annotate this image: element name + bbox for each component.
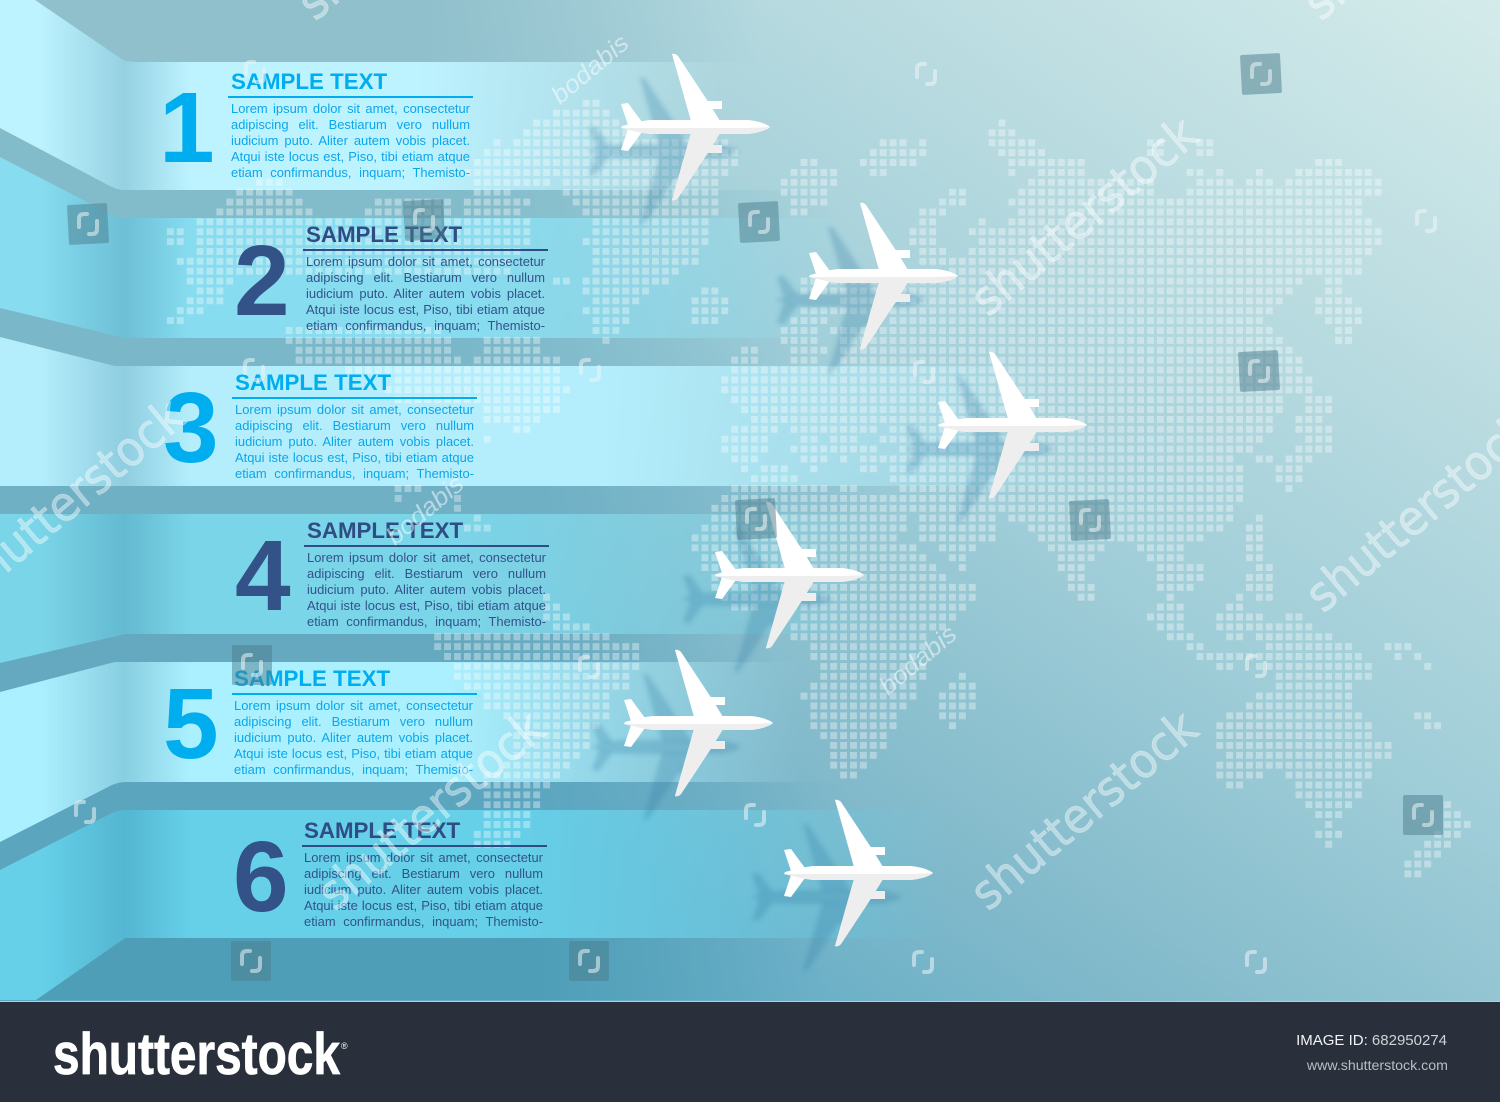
watermark: contributor name: bodabis (546, 29, 634, 110)
body text 3: iudicium puto. Aliter autem vobis placet. (235, 434, 474, 449)
watermark: contributor name: bodabis (381, 470, 469, 551)
body text 4: Atqui iste locus est, Piso, tibi etiam atque (307, 598, 546, 613)
section 5: number, heading and text (163, 666, 477, 780)
body text 5 (234, 698, 473, 777)
footer bar (0, 1001, 1500, 1102)
ribbon 4 (0, 514, 900, 663)
plane shadows (589, 78, 1055, 970)
heading 3: SAMPLE TEXT (235, 370, 391, 394)
body text 2: etiam confirmandus, inquam; Themisto- (306, 318, 545, 333)
heading 1: SAMPLE TEXT (231, 68, 387, 94)
ribbon 1 (0, 0, 760, 190)
dotted world map (167, 103, 1474, 874)
ribbon 5 (0, 662, 800, 842)
ribbon 6 (0, 810, 950, 1000)
body text 3: etiam confirmandus, inquam; Themisto- (235, 466, 474, 481)
body text 5: Lorem ipsum dolor sit amet, consectetur (234, 698, 473, 713)
number 4: 4 (235, 520, 291, 632)
watermark: shutterstock text: shutterstock (960, 105, 1209, 327)
body text 1: iudicium puto. Aliter autem vobis placet. (231, 133, 470, 148)
section 2: number, heading and text (234, 222, 548, 337)
heading 6: SAMPLE TEXT (304, 818, 460, 842)
number 5: 5 (163, 668, 219, 780)
body text 6: iudicium puto. Aliter autem vobis placet. (304, 882, 543, 897)
plane 4 (715, 502, 864, 648)
body text 2: adipiscing elit. Bestiarum vero nullum (306, 270, 545, 285)
watermark: shutterstock text: shutterstock (307, 699, 556, 921)
body text 4: adipiscing elit. Bestiarum vero nullum (307, 566, 546, 581)
body text 6: Lorem ipsum dolor sit amet, consectetur (304, 850, 543, 865)
section 1: number, heading and text (159, 68, 473, 184)
section 4: number, heading and text (235, 518, 549, 632)
body text 1: Atqui iste locus est, Piso, tibi etiam atque (231, 149, 470, 164)
body text 1: Lorem ipsum dolor sit amet, consectetur (231, 101, 470, 116)
body text 2: iudicium puto. Aliter autem vobis placet. (306, 286, 545, 301)
body text 4: etiam confirmandus, inquam; Themisto- (307, 614, 546, 629)
number 2: 2 (234, 225, 290, 337)
ribbon 2 (0, 157, 850, 338)
body text 5: etiam confirmandus, inquam; Themisto- (234, 762, 473, 777)
body text 6: Atqui iste locus est, Piso, tibi etiam atque (304, 898, 543, 913)
shadow bands between ribbons (0, 0, 890, 1000)
number 6: 6 (233, 821, 289, 933)
section 6: number, heading and text (233, 818, 547, 933)
body text 5: Atqui iste locus est, Piso, tibi etiam atque (234, 746, 473, 761)
logo: shutterstock (53, 1022, 341, 1087)
number 1: 1 (159, 72, 215, 184)
watermark: square icons (67, 53, 1443, 981)
logo: ® (341, 1041, 348, 1051)
body text 6 (304, 850, 543, 929)
watermark: corner glyphs (76, 62, 1435, 972)
body text 1: adipiscing elit. Bestiarum vero nullum (231, 117, 470, 132)
number 3: 3 (163, 372, 219, 484)
plane 1 (621, 54, 770, 200)
ribbon 3 (0, 337, 1090, 486)
plane 6 (784, 800, 933, 946)
body text 3: adipiscing elit. Bestiarum vero nullum (235, 418, 474, 433)
plane 5 (624, 650, 773, 796)
plane 2 (809, 203, 958, 349)
plane 3 (938, 352, 1087, 498)
watermark: contributor name (381, 29, 962, 701)
watermark: shutterstock text: shutterstock (960, 699, 1209, 921)
body text 3: Lorem ipsum dolor sit amet, consectetur (235, 402, 474, 417)
body text 1: etiam confirmandus, inquam; Themisto- (231, 165, 470, 180)
body text 4 (307, 550, 546, 629)
watermark: contributor name: bodabis (874, 620, 962, 701)
heading 2: SAMPLE TEXT (306, 222, 462, 246)
body text 3 (235, 402, 474, 481)
heading 4: SAMPLE TEXT (307, 518, 463, 542)
section 3: number, heading and text (163, 370, 477, 484)
body text 2 (306, 254, 545, 333)
body text 2: Lorem ipsum dolor sit amet, consectetur (306, 254, 545, 269)
body text 6: adipiscing elit. Bestiarum vero nullum (304, 866, 543, 881)
body text 4: iudicium puto. Aliter autem vobis placet. (307, 582, 546, 597)
heading 5: SAMPLE TEXT (234, 666, 390, 690)
body text 2: Atqui iste locus est, Piso, tibi etiam atque (306, 302, 545, 317)
body text 1 (231, 101, 470, 180)
body text 6: etiam confirmandus, inquam; Themisto- (304, 914, 543, 929)
body text 3: Atqui iste locus est, Piso, tibi etiam atque (235, 450, 474, 465)
image id: IMAGE ID: 682950274 (1296, 1032, 1447, 1049)
body text 4: Lorem ipsum dolor sit amet, consectetur (307, 550, 546, 565)
site url: www.shutterstock.com (1307, 1058, 1448, 1074)
body text 5: adipiscing elit. Bestiarum vero nullum (234, 714, 473, 729)
body text 5: iudicium puto. Aliter autem vobis placet. (234, 730, 473, 745)
